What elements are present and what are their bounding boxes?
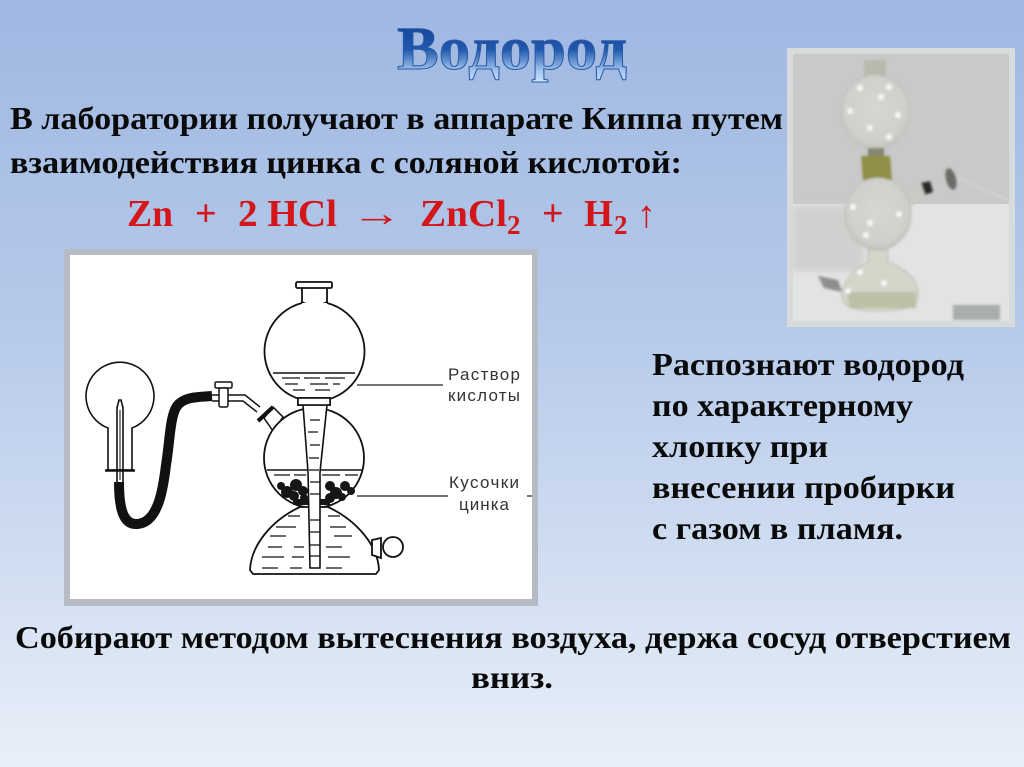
central funnel tube [298,398,330,568]
text block: how hydrogen is recognised [652,346,964,546]
label: acid solution: Раствор [448,365,520,384]
label: zinc pieces: цинка [459,495,510,514]
text block: how hydrogen is collected [15,619,1011,695]
chemical equation: ↑ [637,194,656,236]
chemical equation: 2 HCl [238,193,337,235]
text block: laboratory preparation [10,100,783,180]
photo: Kipp apparatus [787,48,1015,327]
top flask with acid solution [264,282,364,405]
middle flask with zinc pieces [264,408,364,508]
label: zinc pieces: Кусочки [449,473,519,492]
text block: how hydrogen is recognised: внесении пробирки [652,469,955,505]
text block: how hydrogen is recognised: по характерному [652,387,913,423]
chemical equation [127,193,656,240]
chemical equation: ZnCl [420,193,507,235]
rubber hose [119,396,212,524]
text block: how hydrogen is recognised: хлопку при [652,428,828,464]
label: acid solution [448,365,520,405]
icon: rubber bulb with tube [86,362,154,482]
text block: how hydrogen is recognised: с газом в пламя. [652,510,903,546]
label: zinc pieces [449,473,519,514]
text block: how hydrogen is collected: Собирают методом вытеснения воздуха, держа сосуд отверстием [15,619,1011,655]
text block: how hydrogen is collected: вниз. [471,659,553,695]
stopcock and gas outlet [212,382,283,431]
text block: laboratory preparation: взаимодействия цинка с соляной кислотой: [10,144,682,180]
label: acid solution: кислоты [448,386,520,405]
chemical equation: 2 [614,210,628,240]
chemical equation: 2 [507,210,520,240]
title: Водород [397,16,627,83]
leader lines [357,385,532,496]
chemical equation: H [584,193,613,235]
bottom reservoir with liquid [250,507,403,574]
chemical equation: + [195,193,217,235]
chemical equation: → [351,193,402,235]
chemical equation: Zn [127,193,173,235]
panel: Kipp apparatus diagram [64,249,538,606]
text block: how hydrogen is recognised: Распознают водород [652,346,964,382]
text block: laboratory preparation: В лаборатории получают в аппарате Киппа путем [10,100,783,136]
chemical equation: + [542,193,564,235]
